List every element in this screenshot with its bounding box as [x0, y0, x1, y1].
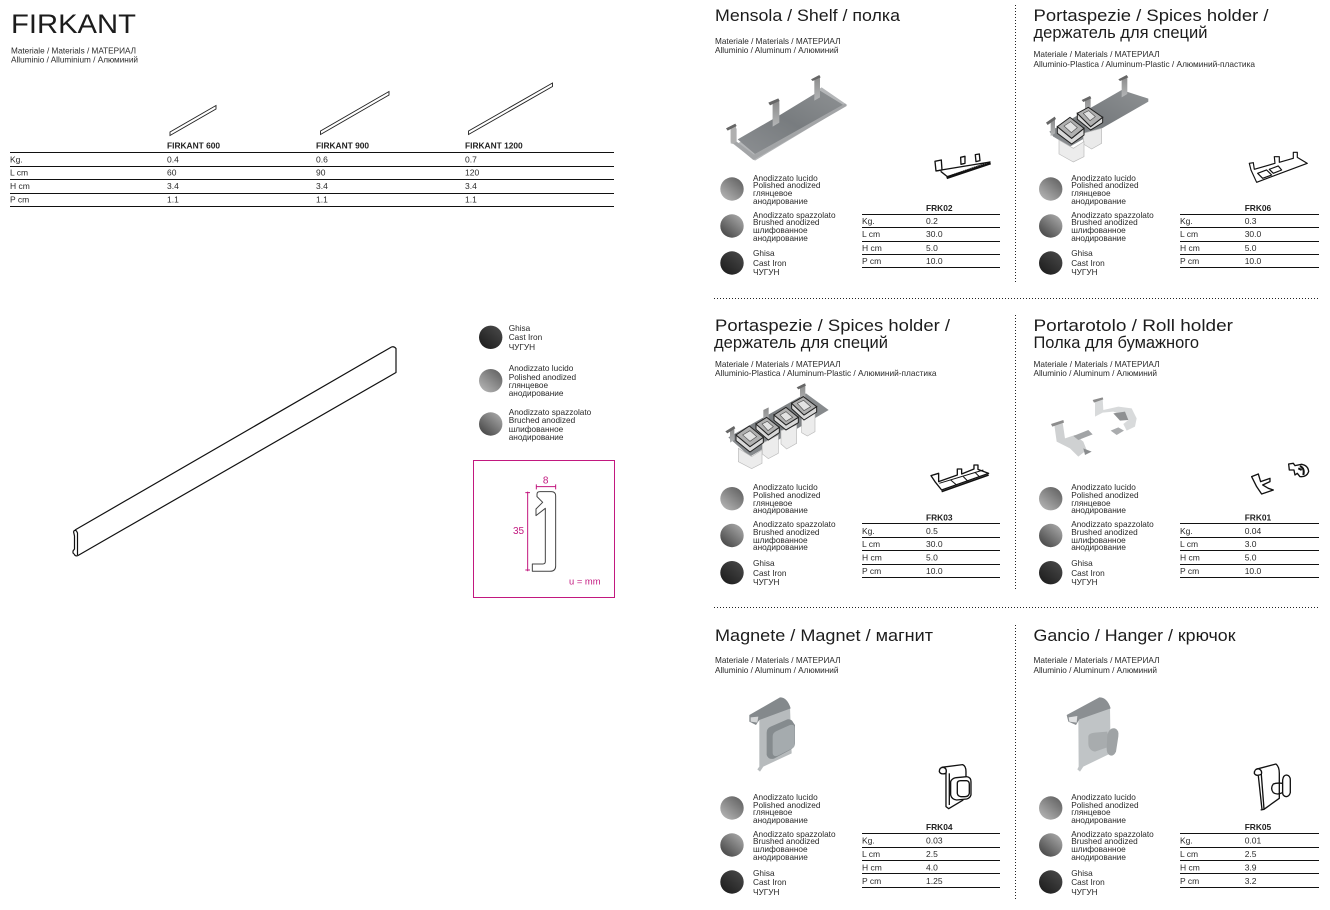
product image: shelf: [726, 75, 847, 161]
table: FIRKANT sizes: 0.7: [465, 154, 477, 164]
swatch: brushed anodized: Brushed anodized: [1071, 528, 1138, 537]
swatch: brushed anodized: шлифованное: [1071, 536, 1126, 545]
swatch: cast iron: ЧУГУН: [509, 343, 535, 352]
swatch: cast iron: [720, 249, 787, 277]
material text: [11, 46, 138, 64]
material text: [715, 359, 937, 378]
icon: bar 600: [170, 106, 216, 136]
swatch: brushed anodized: Brushed anodized: [753, 528, 820, 537]
material text: [715, 36, 840, 55]
icon: profile section: [532, 492, 556, 571]
table: FIRKANT sizes: 1.1: [465, 194, 477, 204]
swatch: cast iron: [720, 559, 787, 587]
material text: Alluminio / Aluminum / Алюминий: [715, 665, 839, 675]
swatch: brushed anodized: Brushed anodized: [753, 218, 820, 227]
table: FRK01: [1180, 512, 1319, 578]
table: FRK03: 5.0: [926, 552, 938, 562]
table: FIRKANT sizes: FIRKANT 600: [167, 140, 220, 150]
table: FRK02: 30.0: [926, 229, 943, 239]
swatch: cast iron: Cast Iron: [753, 878, 787, 887]
swatch: brushed anodized: анодирование: [753, 234, 808, 243]
swatch: polished anodized: анодирование: [753, 816, 808, 825]
swatch: brushed anodized: Anodizzato spazzolato: [753, 520, 836, 529]
table: FIRKANT sizes: 3.4: [167, 181, 179, 191]
swatch: brushed anodized: анодирование: [753, 543, 808, 552]
table: FRK02: H cm: [862, 243, 882, 253]
table: FRK04: 0.03: [926, 836, 943, 846]
table: FRK05: P cm: [1180, 876, 1199, 886]
swatch: polished anodized: анодирование: [1071, 506, 1126, 515]
swatch: polished anodized: Anodizzato lucido: [1071, 174, 1136, 183]
swatch: brushed anodized: анодирование: [753, 853, 808, 862]
table: FRK05: [1180, 822, 1319, 888]
product image: four-jar holder: [725, 383, 829, 469]
table: FRK02: L cm: [862, 229, 880, 239]
swatch: cast iron: Ghisa: [753, 559, 775, 568]
table: FRK05: H cm: [1180, 862, 1200, 872]
swatch: brushed anodized: Brushed anodized: [1071, 837, 1138, 846]
material text: [1034, 655, 1160, 675]
swatch: cast iron: Cast Iron: [1071, 569, 1105, 578]
swatch: cast iron: [720, 869, 787, 897]
table: FIRKANT sizes: P cm: [10, 194, 29, 204]
swatch: cast iron: Cast Iron: [753, 259, 787, 268]
product image: two-jar holder: [1046, 75, 1148, 162]
swatch: polished anodized: [720, 174, 821, 206]
swatch: brushed anodized: шлифованное: [753, 845, 808, 854]
table: FRK03: [862, 512, 1000, 578]
table: FIRKANT sizes: Kg.: [10, 154, 23, 164]
heading: Portarotolo / Roll holder: [1034, 317, 1234, 335]
table: FIRKANT sizes: 90: [316, 168, 326, 178]
icon: FRK04 thumbnail: [939, 765, 971, 809]
table: FRK04: 4.0: [926, 862, 938, 872]
swatch: brushed anodized: [720, 520, 836, 552]
table: FRK01: Kg.: [1180, 526, 1193, 536]
swatch: polished anodized: Anodizzato lucido: [509, 364, 574, 373]
swatch: brushed anodized: анодирование: [509, 433, 564, 442]
table: FRK02: 5.0: [926, 243, 938, 253]
swatch: polished anodized: Anodizzato lucido: [1071, 483, 1136, 492]
swatch: cast iron: ЧУГУН: [1071, 888, 1098, 897]
table: FRK06: H cm: [1180, 243, 1200, 253]
table: FRK06: L cm: [1180, 229, 1198, 239]
material text: Alluminio / Aluminum / Алюминий: [715, 45, 839, 55]
table: FRK02: 0.2: [926, 216, 938, 226]
panel: profile section diagram: [474, 460, 614, 598]
icon: shelf thumbnail: [935, 154, 991, 178]
swatch: polished anodized: [1039, 174, 1139, 206]
table: FRK01: H cm: [1180, 552, 1200, 562]
swatch: cast iron: [1039, 559, 1105, 587]
table: FIRKANT sizes: 1.1: [316, 194, 328, 204]
panel dividers: [714, 5, 1320, 901]
panel: shelf: [715, 7, 1000, 277]
material text: Materiale / Materials / МАТЕРИАЛ: [1034, 49, 1160, 59]
swatch: brushed anodized: анодирование: [1071, 543, 1126, 552]
heading: Portaspezie / Spices holder /: [715, 317, 950, 335]
swatch: brushed anodized: анодирование: [1071, 853, 1126, 862]
product image: roll holder: [1051, 397, 1137, 457]
table: FRK06: P cm: [1180, 256, 1199, 266]
table: FIRKANT sizes: L cm: [10, 168, 28, 178]
heading: держатель для специй: [1034, 24, 1208, 42]
swatch: brushed anodized: шлифованное: [1071, 226, 1126, 235]
swatch: polished anodized: [1039, 793, 1139, 825]
swatch: polished anodized: глянцевое: [1071, 808, 1111, 817]
table: FRK04: [862, 822, 1000, 888]
table: FRK02: [862, 203, 1000, 268]
swatch: cast iron: [1039, 249, 1105, 277]
product image: hanger: [1067, 697, 1119, 772]
table: FRK04: FRK04: [926, 822, 953, 832]
swatch: polished anodized: анодирование: [753, 506, 808, 515]
swatch: cast iron: Ghisa: [1071, 249, 1093, 258]
table: FRK03: 10.0: [926, 566, 943, 576]
material text: Alluminio-Plastica / Aluminum-Plastic / Алюминий-пластика: [715, 368, 937, 378]
panel: hanger: [1034, 627, 1319, 897]
swatch: cast iron: Ghisa: [753, 249, 775, 258]
material text: Alluminio / Alluminium / Алюминий: [11, 54, 138, 64]
material text: Alluminio / Aluminum / Алюминий: [1034, 368, 1157, 378]
table: FRK03: FRK03: [926, 512, 953, 522]
swatch: brushed anodized: [1039, 830, 1154, 862]
swatch: brushed anodized: Brushed anodized: [753, 837, 820, 846]
panel: FIRKANT overview: [10, 9, 614, 598]
swatch: brushed anodized: Bruched anodized: [509, 416, 576, 425]
table: FRK05: 2.5: [1245, 849, 1257, 859]
table: FRK05: L cm: [1180, 849, 1198, 859]
icon: FRK01 thumbnail: [1252, 463, 1309, 494]
swatch: polished anodized: глянцевое: [1071, 189, 1111, 198]
table: FIRKANT sizes: 0.6: [316, 154, 328, 164]
swatch: polished anodized: анодирование: [1071, 816, 1126, 825]
heading: Portaspezie / Spices holder /: [1034, 7, 1269, 25]
heading: [714, 317, 950, 352]
swatch: polished anodized: Polished anodized: [1071, 491, 1139, 500]
panel: roll holder: [1034, 317, 1319, 587]
swatch: polished anodized: [720, 793, 821, 825]
table: FRK04: 1.25: [926, 876, 943, 886]
heading: Полка для бумажного: [1034, 334, 1199, 352]
table: FRK06: [1180, 203, 1319, 268]
swatch: polished anodized: Polished anodized: [509, 373, 577, 382]
swatch: polished anodized: [1039, 483, 1139, 515]
table: FRK03: P cm: [862, 566, 881, 576]
swatch: brushed anodized: шлифованное: [509, 425, 564, 434]
table: FIRKANT sizes: [10, 140, 614, 206]
unit note: u = mm: [569, 576, 601, 588]
table: FRK04: Kg.: [862, 836, 875, 846]
swatch: polished anodized: глянцевое: [753, 189, 793, 198]
swatch: brushed anodized: Anodizzato spazzolato: [509, 408, 592, 417]
table: FRK06: 30.0: [1245, 229, 1262, 239]
swatch: brushed anodized: Brushed anodized: [1071, 218, 1138, 227]
table: FIRKANT sizes: 3.4: [316, 181, 328, 191]
table: FRK03: Kg.: [862, 526, 875, 536]
table: FRK04: 2.5: [926, 849, 938, 859]
swatch: polished anodized: Anodizzato lucido: [753, 793, 818, 802]
icon: FRK03 thumbnail: [931, 465, 989, 492]
dimension 8: 8: [543, 476, 549, 486]
material text: Materiale / Materials / МАТЕРИАЛ: [1034, 655, 1160, 665]
swatch: cast iron: Cast Iron: [753, 569, 787, 578]
swatch: brushed anodized: шлифованное: [753, 226, 808, 235]
table: FRK05: FRK05: [1245, 822, 1272, 832]
panel: spices holder FRK06: [1034, 7, 1319, 277]
table: FRK06: 5.0: [1245, 243, 1257, 253]
swatch: cast iron: Ghisa: [753, 869, 775, 878]
swatch: cast iron: ЧУГУН: [753, 888, 779, 897]
table: FRK04: P cm: [862, 876, 881, 886]
table: FRK01: FRK01: [1245, 512, 1272, 522]
icon: FRK05 thumbnail: [1254, 764, 1290, 810]
swatch: polished anodized: Polished anodized: [753, 801, 821, 810]
table: FRK05: 3.2: [1245, 876, 1257, 886]
icon: FRK06 thumbnail: [1249, 152, 1307, 182]
swatch: brushed anodized: [720, 211, 836, 243]
table: FIRKANT sizes: 1.1: [167, 194, 179, 204]
table: FRK01: 10.0: [1245, 566, 1262, 576]
table: FRK01: 3.0: [1245, 539, 1257, 549]
material text: [715, 655, 840, 675]
material text: Alluminio / Aluminum / Алюминий: [1034, 665, 1157, 675]
swatch: cast iron: [1039, 869, 1105, 897]
heading: Gancio / Hanger / крючок: [1034, 627, 1236, 645]
heading: Magnete / Magnet / магнит: [715, 627, 933, 645]
heading: держатель для специй: [714, 334, 888, 352]
swatch: cast iron: ЧУГУН: [1071, 578, 1098, 587]
swatch: polished anodized: анодирование: [753, 197, 808, 206]
material text: Materiale / Materials / МАТЕРИАЛ: [1034, 359, 1160, 369]
table: FIRKANT sizes: 3.4: [465, 181, 477, 191]
swatch: cast iron: Cast Iron: [1071, 259, 1105, 268]
swatch: brushed anodized: Anodizzato spazzolato: [753, 211, 836, 220]
table: FRK03: 30.0: [926, 539, 943, 549]
swatch: cast iron: ЧУГУН: [1071, 268, 1098, 277]
swatch: cast iron: [479, 324, 543, 352]
product image: magnet: [749, 697, 795, 772]
swatch: cast iron: Ghisa: [509, 324, 531, 333]
table: FIRKANT sizes: 60: [167, 168, 177, 178]
swatch: brushed anodized: [479, 408, 592, 442]
table: FRK05: Kg.: [1180, 836, 1193, 846]
material text: Materiale / Materials / МАТЕРИАЛ: [715, 359, 840, 369]
table: FRK04: H cm: [862, 862, 882, 872]
table: FRK06: Kg.: [1180, 216, 1193, 226]
table: FIRKANT sizes: H cm: [10, 181, 30, 191]
heading: [1034, 7, 1269, 42]
swatch: cast iron: Cast Iron: [1071, 878, 1105, 887]
table: FIRKANT sizes: FIRKANT 1200: [465, 140, 523, 150]
table: FRK05: 0.01: [1245, 836, 1262, 846]
table: FRK06: 10.0: [1245, 256, 1262, 266]
swatch: polished anodized: анодирование: [509, 389, 564, 398]
table: FRK01: 5.0: [1245, 552, 1257, 562]
material text: [1034, 49, 1255, 69]
table: FRK02: Kg.: [862, 216, 875, 226]
swatch: polished anodized: [720, 483, 821, 515]
title: FIRKANT: [11, 9, 136, 39]
table: FIRKANT sizes: 0.4: [167, 154, 179, 164]
icon: bar 1200: [468, 83, 552, 134]
table: FRK03: H cm: [862, 552, 882, 562]
swatch: brushed anodized: шлифованное: [753, 536, 808, 545]
swatch: polished anodized: [479, 364, 577, 398]
swatch: polished anodized: Polished anodized: [753, 491, 821, 500]
swatch: polished anodized: анодирование: [1071, 197, 1126, 206]
swatch: brushed anodized: анодирование: [1071, 234, 1126, 243]
swatch: brushed anodized: [1039, 211, 1154, 243]
swatch: polished anodized: Anodizzato lucido: [753, 483, 818, 492]
swatch: polished anodized: Polished anodized: [1071, 181, 1139, 190]
icon: large bar drawing: [73, 347, 396, 556]
swatch: polished anodized: Polished anodized: [753, 181, 821, 190]
table: FIRKANT sizes: 120: [465, 168, 479, 178]
icon: bar 900: [320, 92, 389, 134]
table: FRK06: FRK06: [1245, 203, 1272, 213]
swatch: cast iron: Cast Iron: [509, 333, 543, 342]
dimension 35: 35: [513, 526, 525, 537]
swatch: cast iron: Ghisa: [1071, 869, 1093, 878]
swatch: brushed anodized: [1039, 520, 1154, 552]
swatch: polished anodized: Anodizzato lucido: [753, 174, 818, 183]
swatch: polished anodized: глянцевое: [509, 381, 548, 390]
swatch: cast iron: Ghisa: [1071, 559, 1093, 568]
table: FIRKANT sizes: FIRKANT 900: [316, 140, 369, 150]
swatch: polished anodized: Polished anodized: [1071, 801, 1139, 810]
swatch: brushed anodized: [720, 830, 836, 862]
swatch: cast iron: ЧУГУН: [753, 578, 779, 587]
swatch: brushed anodized: шлифованное: [1071, 845, 1126, 854]
table: FRK02: P cm: [862, 256, 881, 266]
swatch: brushed anodized: Anodizzato spazzolato: [1071, 830, 1154, 839]
dimension 35: [513, 492, 530, 571]
material text: Materiale / Materials / МАТЕРИАЛ: [715, 36, 840, 46]
table: FRK03: 0.5: [926, 526, 938, 536]
table: FRK01: 0.04: [1245, 526, 1262, 536]
material text: Materiale / Materials / МАТЕРИАЛ: [715, 655, 840, 665]
dimension 8: [536, 476, 556, 489]
material text: Alluminio-Plastica / Aluminum-Plastic / Алюминий-пластика: [1034, 59, 1255, 69]
table: FRK03: L cm: [862, 539, 880, 549]
swatch: brushed anodized: Anodizzato spazzolato: [753, 830, 836, 839]
table: FRK04: L cm: [862, 849, 880, 859]
heading: [1034, 317, 1234, 352]
panel: spices holder FRK03: [714, 317, 1000, 587]
swatch: cast iron: ЧУГУН: [753, 268, 779, 277]
table: FRK01: L cm: [1180, 539, 1198, 549]
table: FRK01: P cm: [1180, 566, 1199, 576]
material text: Materiale / Materials / МАТЕРИАЛ: [11, 46, 136, 56]
heading: Mensola / Shelf / полка: [715, 7, 901, 25]
swatch: polished anodized: Anodizzato lucido: [1071, 793, 1136, 802]
table: FRK02: FRK02: [926, 203, 953, 213]
table: FRK05: 3.9: [1245, 862, 1257, 872]
swatch: polished anodized: глянцевое: [1071, 499, 1111, 508]
panel: magnet: [715, 627, 1000, 897]
swatch: polished anodized: глянцевое: [753, 499, 793, 508]
swatch: brushed anodized: Anodizzato spazzolato: [1071, 520, 1154, 529]
swatch: polished anodized: глянцевое: [753, 808, 793, 817]
material text: [1034, 359, 1160, 378]
table: FRK02: 10.0: [926, 256, 943, 266]
swatch: brushed anodized: Anodizzato spazzolato: [1071, 211, 1154, 220]
table: FRK06: 0.3: [1245, 216, 1257, 226]
